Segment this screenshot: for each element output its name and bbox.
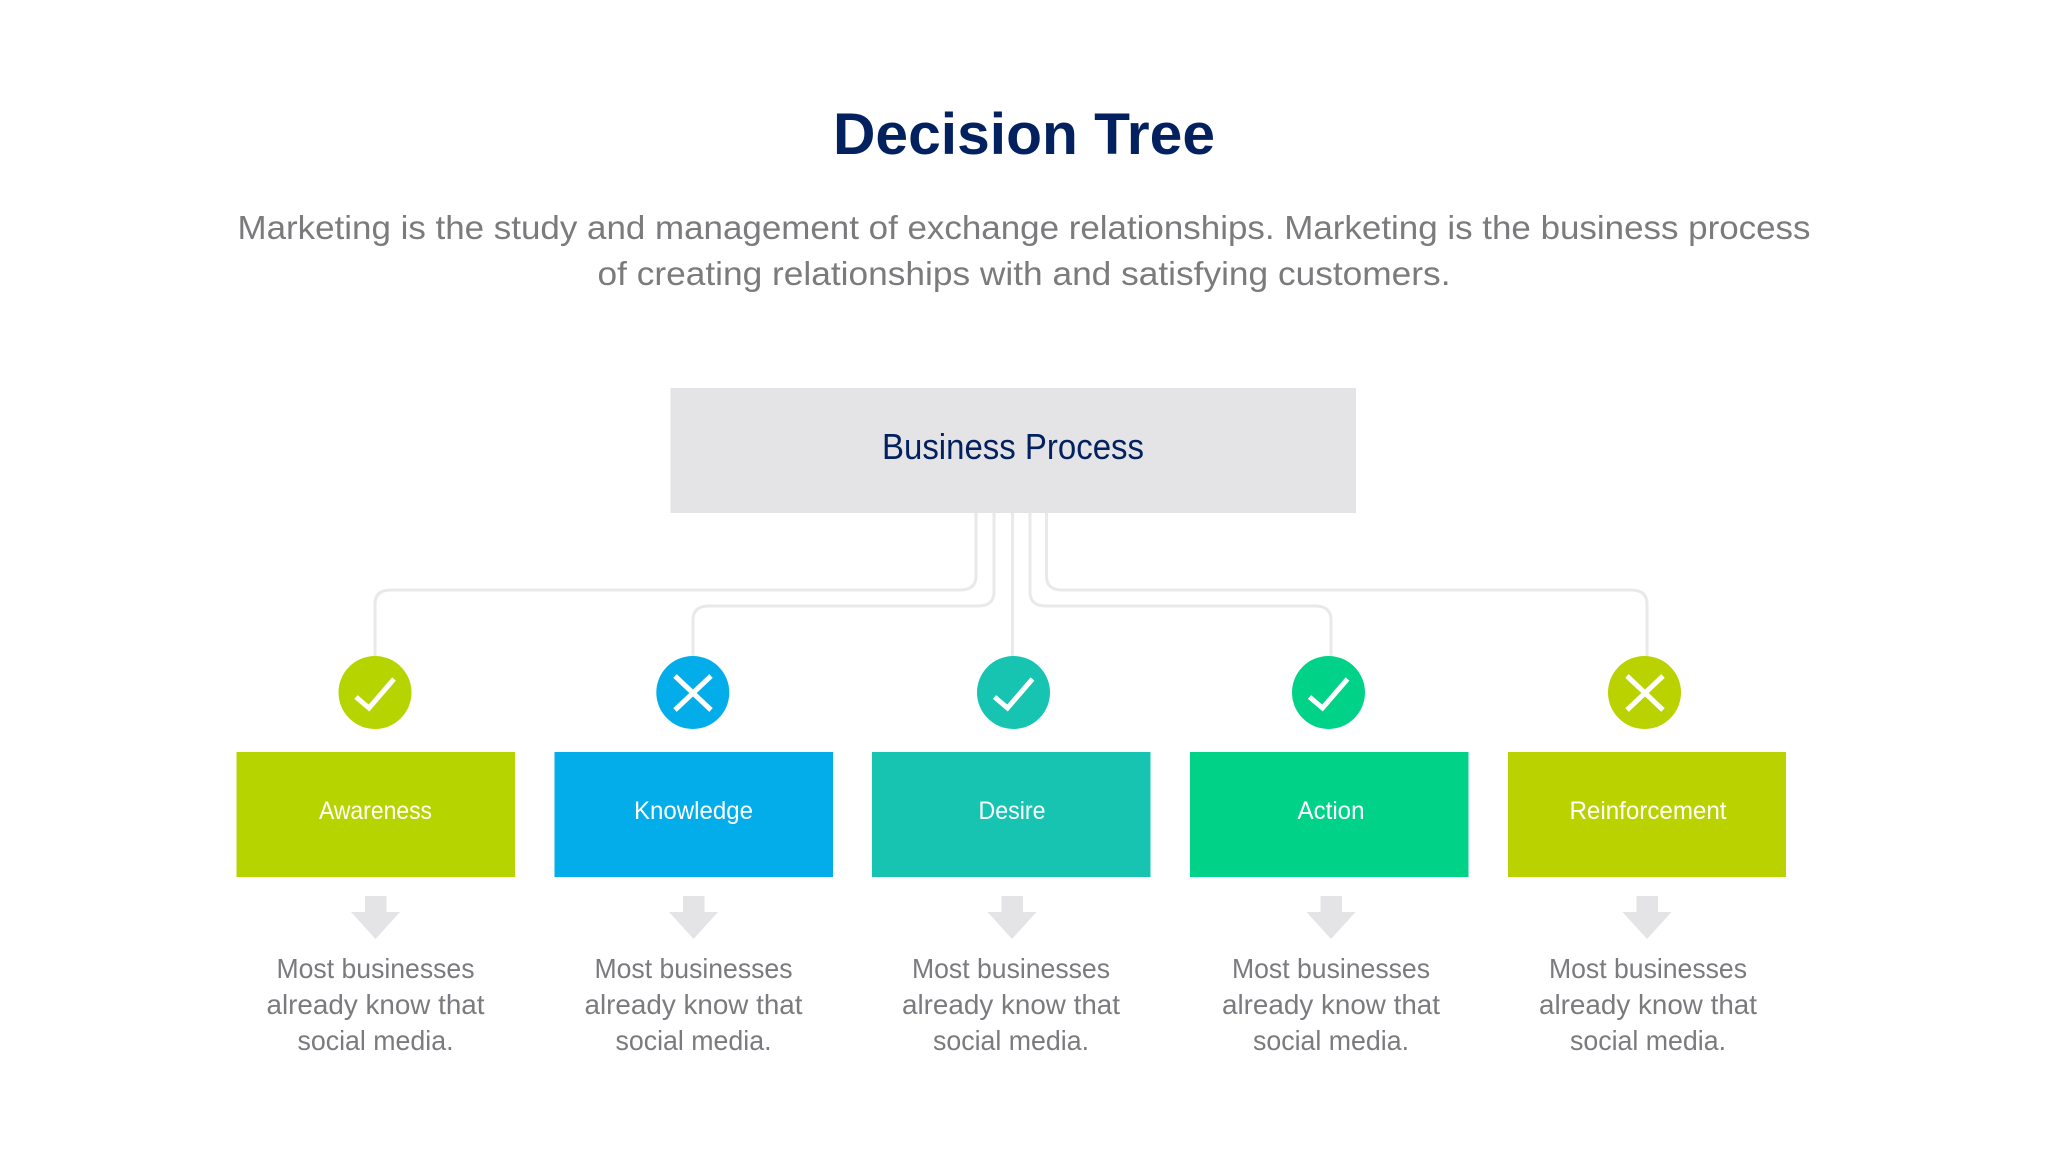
box: Action: Action [1298, 797, 1364, 825]
description: already know that [902, 989, 1120, 1020]
icon: check [338, 656, 412, 729]
box: Reinforcement [1508, 752, 1786, 877]
arrow [669, 896, 718, 939]
title: Decision Tree [833, 102, 1215, 167]
description: Most businesses [912, 953, 1110, 984]
description: Most businesses [1549, 953, 1747, 984]
box: Desire: Desire [978, 797, 1046, 825]
description [1539, 953, 1757, 1056]
column: Knowledge [554, 656, 833, 1056]
root box: Business Process [670, 388, 1356, 513]
root box: Business Process: Business Process [882, 426, 1144, 467]
column: Awareness [236, 656, 515, 1056]
description: social media. [1253, 1025, 1409, 1056]
description: already know that [1222, 989, 1440, 1020]
box: Reinforcement: Reinforcement [1570, 797, 1727, 825]
description: Most businesses [1232, 953, 1430, 984]
column: Reinforcement [1508, 656, 1786, 1056]
subtitle text block: Marketing is the study and management of exchange relationships. Marketing is the business process [238, 209, 1811, 246]
connector lines [375, 513, 1647, 656]
box: Knowledge: Knowledge [634, 797, 753, 825]
description: social media. [298, 1025, 454, 1056]
box: Awareness [236, 752, 515, 877]
arrow [1622, 896, 1672, 939]
box: Knowledge [554, 752, 833, 877]
description: already know that [1539, 989, 1757, 1020]
arrow [351, 896, 400, 939]
subtitle text block [238, 209, 1811, 292]
arrow [1306, 896, 1356, 939]
icon: check [977, 656, 1050, 729]
box: Action [1190, 752, 1468, 877]
description: already know that [584, 989, 803, 1020]
box: Awareness: Awareness [319, 797, 432, 825]
column: Desire [872, 656, 1150, 1056]
description: social media. [1570, 1025, 1726, 1056]
arrow [988, 896, 1036, 939]
description: social media. [933, 1025, 1089, 1056]
description: Most businesses [594, 953, 792, 984]
description: social media. [616, 1025, 772, 1056]
description [902, 953, 1120, 1056]
description [1222, 953, 1440, 1056]
description [584, 953, 803, 1056]
icon: check [1292, 656, 1365, 729]
column: Action [1190, 656, 1468, 1056]
subtitle text block: of creating relationships with and satisfying customers. [598, 255, 1450, 292]
description: Most businesses [276, 953, 474, 984]
description: already know that [266, 989, 485, 1020]
icon: cross [656, 656, 729, 729]
icon: cross [1608, 656, 1681, 729]
box: Desire [872, 752, 1150, 877]
description [266, 953, 485, 1056]
